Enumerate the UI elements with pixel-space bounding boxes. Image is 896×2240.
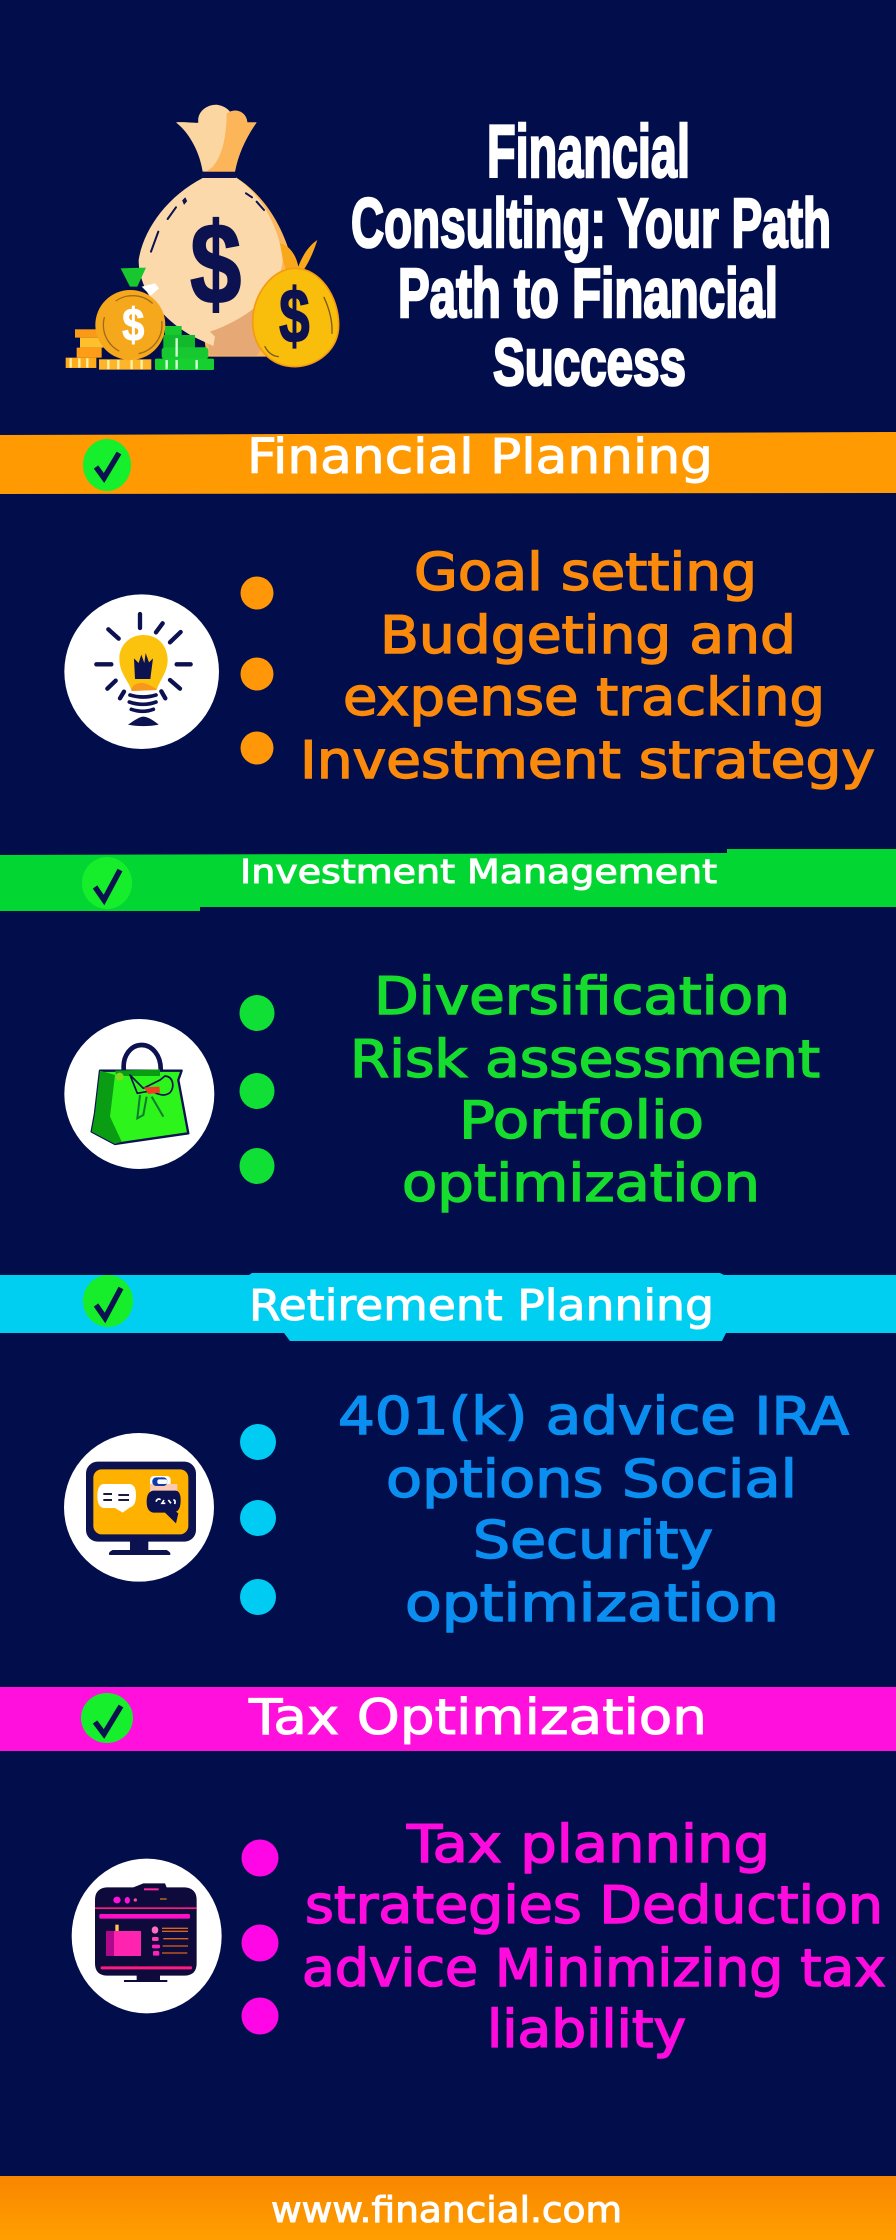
- icon: monitor with chat bubbles: [64, 1433, 214, 1582]
- footer: [0, 2176, 896, 2240]
- panel: financial planning: [0, 429, 896, 791]
- text: tax optimization items: Tax planning: [406, 1815, 770, 1875]
- icon: light bulb: [64, 594, 219, 749]
- header: [66, 105, 831, 399]
- title: Financial: [487, 110, 690, 193]
- text: investment management items: optimization: [402, 1154, 760, 1214]
- text: investment management items: Risk assessment: [350, 1030, 820, 1090]
- panel: retirement planning: [0, 1273, 896, 1634]
- text: financial planning items: Budgeting and: [380, 606, 796, 666]
- panel: tax optimization: [0, 1687, 896, 2060]
- banner: financial planning: Financial Planning: [247, 429, 713, 485]
- banner: financial planning: [0, 429, 896, 494]
- banner: retirement planning: Retirement Planning: [249, 1281, 714, 1331]
- text: tax optimization items: liability: [487, 2000, 686, 2060]
- text: retirement planning items: options Social: [386, 1450, 797, 1510]
- icon: money bags and coins: [66, 105, 339, 370]
- bullet markers: [240, 1424, 276, 1615]
- text: investment management items: Portfolio: [459, 1091, 704, 1151]
- text: retirement planning items: [338, 1387, 849, 1634]
- text: retirement planning items: 401(k) advice IRA: [338, 1387, 849, 1447]
- panel: investment management: [0, 849, 896, 1214]
- banner: investment management: [0, 849, 896, 911]
- icon: tax dashboard monitor: [72, 1859, 222, 2013]
- text: financial planning items: expense tracking: [343, 668, 825, 728]
- banner: tax optimization: Tax Optimization: [248, 1689, 707, 1746]
- title: [351, 110, 831, 399]
- bullet markers: [240, 576, 274, 764]
- text: tax optimization items: strategies Deduction: [305, 1876, 883, 1936]
- text: tax optimization items: advice Minimizing tax: [302, 1939, 886, 1999]
- text: financial planning items: Goal setting: [414, 543, 757, 603]
- text: investment management items: Diversification: [374, 967, 790, 1027]
- text: investment management items: [350, 967, 820, 1214]
- icon: green bag: [64, 1019, 214, 1169]
- icon: money bags and coins: $: [190, 201, 241, 329]
- banner: investment management: Investment Management: [240, 852, 717, 891]
- banner: tax optimization: [0, 1687, 896, 1751]
- icon: money bags and coins: $: [122, 300, 144, 351]
- icon: money bags and coins: $: [279, 275, 310, 360]
- text: retirement planning items: optimization: [405, 1574, 779, 1634]
- title: Success: [493, 325, 686, 399]
- text: financial planning items: [300, 543, 875, 791]
- bullet markers: [242, 1840, 278, 2034]
- bullet markers: [240, 995, 274, 1184]
- text: tax optimization items: [302, 1815, 886, 2060]
- banner: retirement planning: [0, 1273, 896, 1341]
- text: financial planning items: Investment strategy: [300, 731, 875, 791]
- footer: www.financial.com: [271, 2190, 622, 2231]
- text: retirement planning items: Security: [473, 1511, 713, 1571]
